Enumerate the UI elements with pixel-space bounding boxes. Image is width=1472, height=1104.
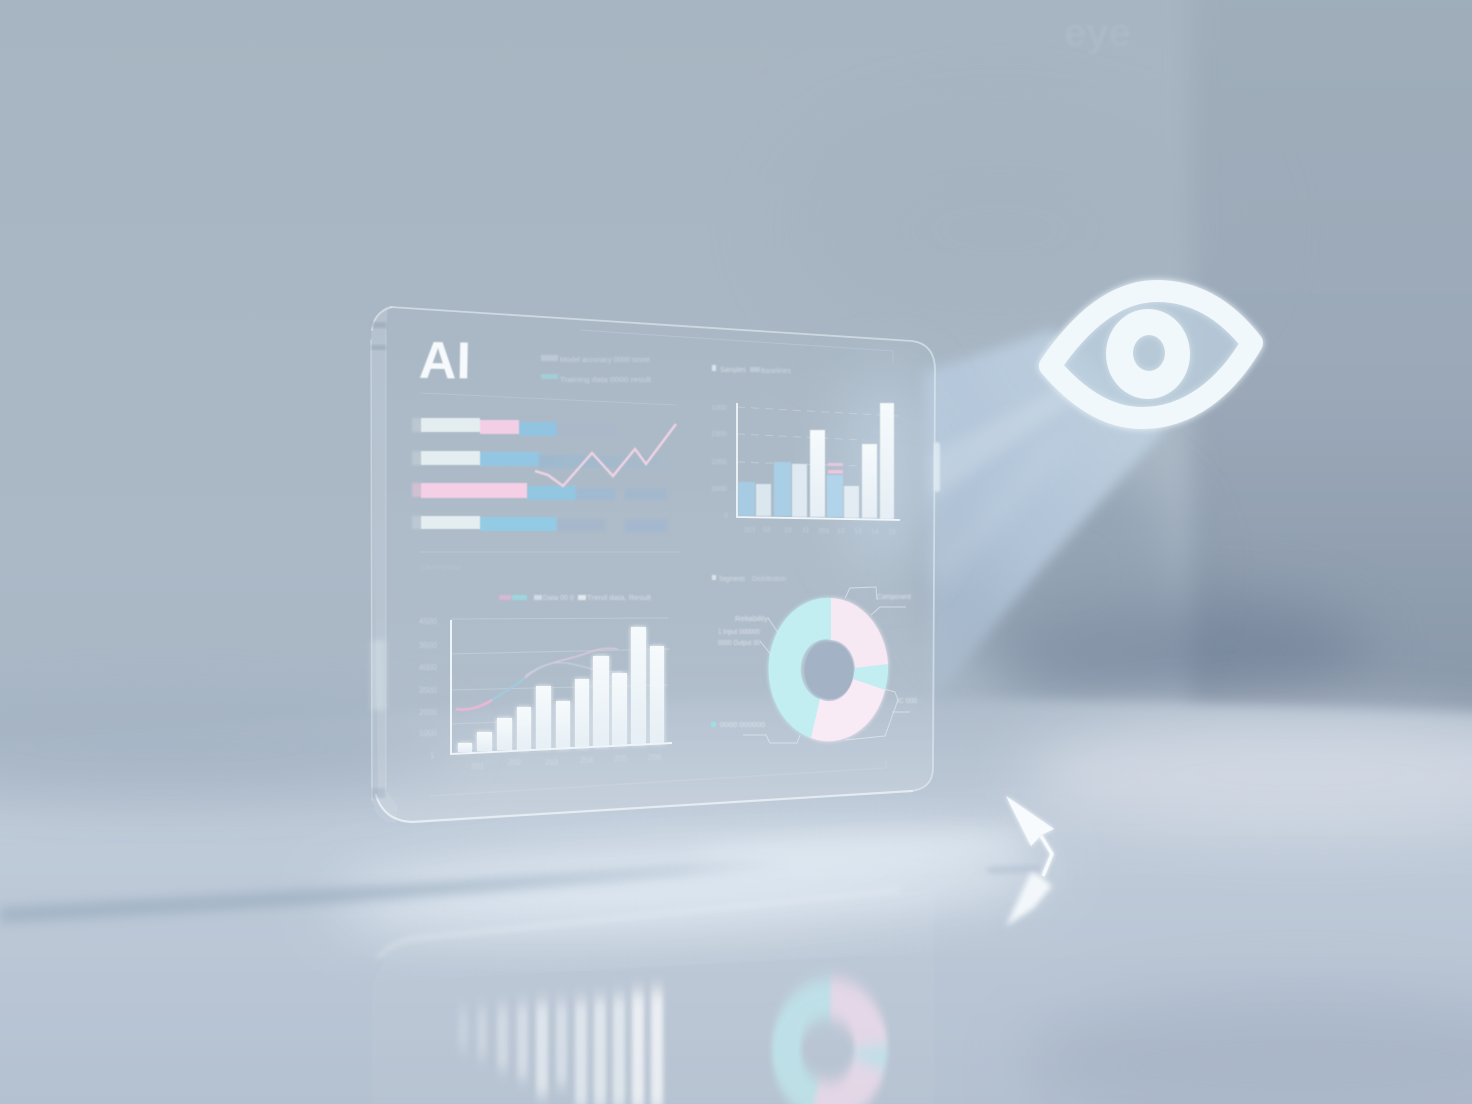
axis labels: 10 xyxy=(784,527,792,534)
chart: pink trend line xyxy=(535,424,676,486)
donut labels: Component xyxy=(877,594,911,601)
glass panel xyxy=(371,306,940,823)
axis labels: 1000 xyxy=(711,459,727,466)
axis labels: 15 xyxy=(888,529,896,536)
legend: Samples xyxy=(720,367,746,374)
curves xyxy=(456,648,622,710)
axis labels: 204 xyxy=(580,756,594,765)
faint section label: Overview xyxy=(420,563,462,572)
axis labels: 4500 xyxy=(419,617,437,626)
donut hole centre xyxy=(808,642,854,699)
legend: Trend data, Result xyxy=(587,595,651,602)
axis labels: 202 xyxy=(508,758,522,767)
donut hole xyxy=(804,638,856,702)
axis labels: 205 xyxy=(614,754,628,763)
axis labels: 206 xyxy=(648,753,662,762)
panel: side edge xyxy=(371,306,398,823)
panel: edge gloss xyxy=(371,322,940,798)
legend xyxy=(712,365,791,375)
legend: Baselines xyxy=(761,368,791,375)
panel: outline highlights xyxy=(371,307,935,822)
axis labels: 3500 xyxy=(419,686,437,695)
axis labels: 2000 xyxy=(419,708,437,717)
chart: bottom left bars and curves xyxy=(419,595,672,771)
floor shadow streak xyxy=(0,862,1040,922)
donut labels: Reliability xyxy=(735,616,769,623)
axis labels: 11 xyxy=(802,527,809,534)
panel: glass face xyxy=(372,306,935,823)
panel reflection on floor xyxy=(372,890,934,1104)
donut labels: 0000 000000 xyxy=(720,722,765,729)
floor xyxy=(0,695,1472,1104)
axis labels: 1 xyxy=(430,751,435,760)
legend: top left: Training data 0000 result xyxy=(560,377,651,384)
legend: top left xyxy=(541,355,651,384)
legend: Data 00 0 xyxy=(543,595,574,602)
donut key dot xyxy=(710,722,716,728)
faint wall text: eye: eye xyxy=(1064,11,1131,55)
donut labels xyxy=(718,594,917,729)
axis labels: 14 xyxy=(871,529,879,536)
axis labels: 1500 xyxy=(711,431,727,438)
donut segments xyxy=(769,598,888,741)
axes xyxy=(737,403,900,520)
axis labels: 4000 xyxy=(419,663,437,672)
axis labels: 1000 xyxy=(419,729,437,738)
bars xyxy=(738,403,894,519)
icon: glowing eye xyxy=(1050,291,1252,418)
axis labels: 201 xyxy=(744,527,756,534)
donut labels: 0000 Output 00 xyxy=(718,640,760,647)
grid lines xyxy=(450,618,670,724)
donut leader lines xyxy=(743,587,910,743)
axis labels: 12 xyxy=(837,528,845,535)
icon: cursor arrow xyxy=(1006,796,1054,876)
axis labels xyxy=(711,405,896,536)
donut legend xyxy=(712,575,786,583)
axis labels: 0 xyxy=(724,513,728,520)
donut legend: Distribution xyxy=(752,576,786,583)
donut legend: Segments xyxy=(719,576,745,583)
legend: top left: Model accuracy 0000 score xyxy=(560,357,650,364)
chart: donut xyxy=(710,575,917,743)
axis labels: 3500 xyxy=(419,641,437,650)
axis labels: 203 xyxy=(545,758,559,767)
axis labels xyxy=(419,617,662,771)
legend xyxy=(499,595,651,602)
chart: stacked horizontal bars xyxy=(412,418,667,532)
axes xyxy=(451,620,672,754)
heading: AI: AI xyxy=(418,332,471,390)
axis labels: 201 xyxy=(471,762,485,771)
axis labels: 13 xyxy=(854,528,862,535)
grid lines xyxy=(737,407,898,488)
bars xyxy=(458,627,664,752)
axis labels: 1000 xyxy=(711,405,727,412)
panel: inner hairlines xyxy=(420,330,893,796)
light beam from eye to panel xyxy=(925,330,1166,705)
axis labels: 02 xyxy=(763,527,771,534)
cursor reflection xyxy=(1006,872,1052,926)
axis labels: 201 xyxy=(818,528,830,535)
donut labels: 1 Input 000000 xyxy=(718,629,760,636)
chart: top right bar chart xyxy=(711,365,900,536)
axis labels: 1000 xyxy=(711,486,727,493)
donut labels: IC 000 xyxy=(897,698,917,705)
